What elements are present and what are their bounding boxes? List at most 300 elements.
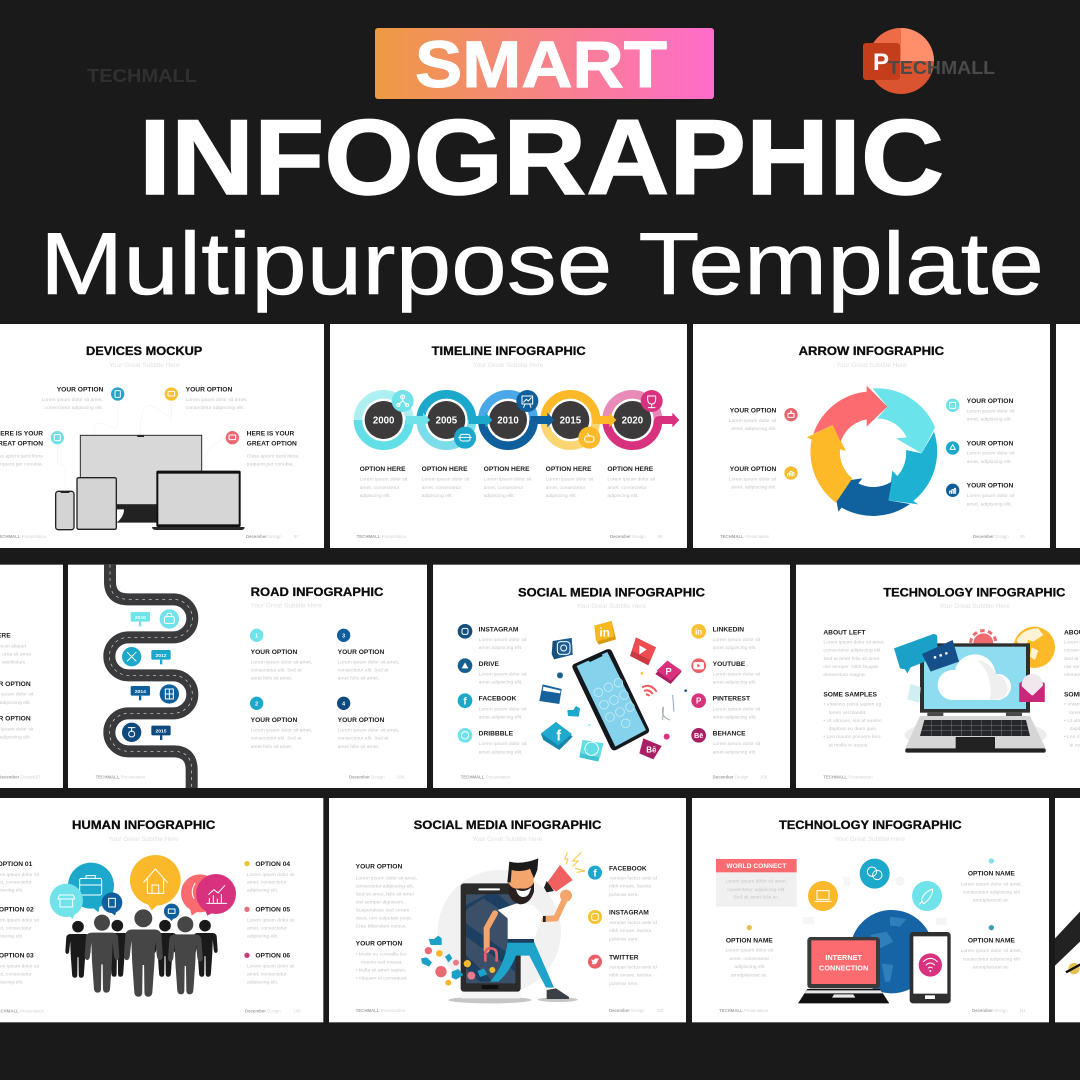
option upper right: consectetur adipiscing elit [963, 890, 1020, 896]
rings [358, 394, 658, 446]
text block two [356, 940, 408, 982]
callout: world connect: WORLD CONNECT [726, 863, 786, 870]
pinterest item: PINTEREST [713, 696, 750, 703]
youtube item: YOUTUBE [713, 661, 746, 668]
footer [357, 534, 663, 539]
about left: nisi semper. Nibh feugiat [823, 664, 879, 670]
magnet [485, 948, 497, 962]
list right [691, 624, 761, 755]
circular arrows [807, 386, 937, 516]
text block one: Cras bibendum cursus. [356, 924, 407, 930]
option columns: adipiscing elit. [360, 493, 391, 499]
option columns [360, 466, 656, 499]
some samples: SOME SAMPLES [823, 691, 878, 698]
option top left: Lorem ipsum dolor sit amet, [41, 397, 103, 403]
heading: SOCIAL MEDIA INFOGRAPHIC [414, 818, 601, 832]
option 06: amet, consectetur [247, 971, 287, 977]
footer: 97 [294, 534, 299, 539]
sign 2010: 2010 [135, 615, 146, 621]
option right: torquent per conubia. [247, 462, 294, 468]
text block one [356, 864, 417, 930]
right option 3 [946, 483, 1015, 507]
option 3: amet felis sit amet. [338, 676, 379, 682]
about left: ABOUT LEFT [823, 629, 865, 636]
subheading: Your Great Subtitle Here [939, 604, 1011, 610]
title: INFOGRAPHIC: INFOGRAPHIC [139, 97, 944, 217]
some samples [823, 691, 882, 748]
back row person 2 [105, 920, 130, 977]
item: facebook: f [593, 868, 597, 879]
option top right: YOUR OPTION [186, 387, 232, 394]
option columns: OPTION HERE [360, 466, 406, 473]
option columns: Lorem ipsum dolor sit [484, 477, 532, 483]
icon: network [392, 390, 414, 412]
item: instagram: pulvinar sem. [609, 936, 639, 942]
drive item: DRIVE [479, 661, 500, 668]
pinterest item [691, 693, 761, 720]
laptop [798, 937, 889, 1003]
panel: social media infographic one [433, 565, 790, 788]
head [507, 858, 538, 904]
some samples: • Ut ultricies, nisi at eusmo [823, 718, 882, 724]
icon: pinterest cube: P [666, 666, 672, 676]
option columns: amet, consectetur [360, 485, 400, 491]
text block two: mauris sed massa. [361, 960, 403, 966]
monitor [80, 435, 202, 523]
about left [823, 629, 885, 678]
option columns: amet, consectetur [607, 485, 647, 491]
option top right [165, 387, 247, 411]
right option 3: Lorem ipsum dolor sit [967, 493, 1015, 499]
footer: 99 [1020, 534, 1025, 539]
facebook item: Lorem ipsum dolor sit [479, 706, 527, 712]
option lower left: ametplacerat ac. [731, 972, 768, 978]
teal bubble: briefcase [68, 863, 114, 912]
option lower left [726, 925, 774, 978]
phone [56, 491, 74, 530]
subheading: Your Great Subtitle Here [577, 604, 647, 610]
option 2: amet felis sit amet. [251, 744, 292, 750]
heading: TECHNOLOGY INFOGRAPHIC [779, 818, 962, 832]
linkedin item [691, 624, 761, 651]
option top right: Lorem ipsum dolor sit amet, [186, 397, 247, 403]
pinterest item: amet adipiscing elit. [713, 714, 756, 720]
some samples: lorem vel blandit. [829, 710, 866, 716]
footer [0, 534, 299, 539]
option lower left: Lorem ipsum dolor sit [726, 948, 774, 954]
option lower right: Lorem ipsum dolor sit amet, [961, 948, 1022, 954]
drive item [458, 658, 527, 686]
option top left [41, 387, 124, 411]
right option 2 [946, 440, 1015, 465]
drive item: Lorem ipsum dolor sit [479, 672, 527, 678]
option 4 [337, 697, 399, 750]
panel: timeline infographic [330, 324, 687, 548]
icon: linkedin cube [594, 621, 616, 645]
pinterest item: Lorem ipsum dolor sit [713, 706, 761, 712]
navy small bubble [102, 892, 122, 916]
item: twitter: pulvinar sem. [609, 981, 639, 987]
right option 1: amet, adipiscing elit. [967, 417, 1012, 423]
icon: piggy [578, 427, 600, 449]
phone illustration [572, 649, 649, 750]
callout: world connect: Lorem ipsum dolor sit amet, [726, 879, 787, 885]
magenta bubble: chart [196, 874, 236, 916]
subtitle: Multipurpose Template: Multipurpose Template [40, 214, 1044, 313]
year 2005 [427, 401, 465, 439]
header [40, 27, 1044, 313]
option 4: Lorem ipsum dolor sit amet, [338, 728, 399, 734]
option 1: YOUR OPTION [251, 649, 297, 656]
footer [96, 775, 404, 780]
connector lines [57, 402, 226, 490]
footer [0, 1008, 301, 1013]
item: facebook: nibh ornare, lacinia [609, 884, 651, 890]
icon: car [454, 427, 476, 449]
icon: folder [539, 684, 562, 704]
callout: world connect [716, 859, 797, 907]
sign 2015: 2015 [155, 729, 167, 735]
option columns: OPTION HERE [484, 466, 530, 473]
subheading: Your Great Subtitle Here [251, 604, 322, 610]
megaphone [544, 865, 573, 902]
calendar [907, 684, 921, 703]
cloud [938, 654, 1011, 700]
right option 2: Lorem ipsum dolor sit [967, 451, 1015, 457]
facebook item: FACEBOOK [479, 696, 517, 703]
footer [720, 534, 1025, 539]
lightning marks [565, 852, 585, 872]
footer: TECHMALL Presentation [461, 774, 511, 779]
option 04: OPTION 04 [255, 861, 290, 868]
option columns: adipiscing elit. [484, 493, 515, 499]
sign 2012 [151, 650, 171, 664]
sign 2014 [131, 686, 150, 700]
year 2020 [613, 401, 651, 439]
icon: PowerPoint logo: P [873, 49, 889, 76]
left option 1 [729, 408, 798, 432]
option lower right: OPTION NAME [968, 937, 1015, 944]
item: facebook: Aenean luctus ante id [609, 876, 657, 882]
option 1 [250, 629, 312, 682]
subheading: Your Great Subtitle Here [473, 363, 544, 369]
icon: rocket circle [912, 881, 942, 911]
option columns: OPTION HERE [422, 466, 468, 473]
icon: stop 1 [160, 609, 179, 629]
icon: instagram cube [552, 638, 573, 659]
option right: Class aptent taciti litora [247, 454, 298, 460]
year 2000: 2000 [373, 416, 394, 427]
option lower right: consectetur adipiscing elit [963, 956, 1020, 962]
option 04: amet, consectetur [247, 880, 287, 886]
right option 1: YOUR OPTION [967, 398, 1013, 405]
dribbble item: DRIBBBLE [479, 731, 514, 738]
option top left: YOUR OPTION [57, 387, 104, 394]
text block one: Sed sit amet, felis sit amet [356, 891, 414, 897]
some samples: dapibus eu diam quis. [829, 726, 877, 732]
text block one: nisl semper dignissim. [356, 899, 405, 905]
sign 2010 [131, 612, 150, 626]
option 2: 2 [255, 701, 258, 707]
callout: world connect: Sed sit amet felis ac. [733, 895, 779, 901]
item: instagram: INSTAGRAM [609, 910, 649, 917]
text block one: consectetur adipiscing elit. [356, 883, 414, 889]
icon: PowerPoint logo [863, 28, 934, 94]
option columns: Lorem ipsum dolor sit [422, 477, 470, 483]
navy bubble: small [164, 904, 179, 921]
year 2000 [365, 401, 403, 439]
icon: facebook cube [541, 722, 573, 750]
arrows [406, 413, 679, 427]
right option 1 [946, 398, 1015, 423]
option 1: 1 [255, 633, 258, 639]
panel: partial slide bottom right [1055, 798, 1080, 1022]
panel: social media infographic two [329, 798, 686, 1022]
text block one: Suspendisse sed ornare [356, 908, 410, 914]
yellow bubble: house [130, 855, 181, 910]
dribbble item: amet adipiscing elit. [479, 749, 522, 755]
icon: chart [516, 390, 538, 412]
footer: December Design [245, 1008, 281, 1013]
footer: 111 [1019, 1008, 1027, 1013]
behance item: BEHANCE [713, 731, 746, 738]
item: twitter: nibh ornare, lacinia [609, 973, 651, 979]
instagram item [458, 624, 527, 651]
watermark right: TECHMALL [888, 58, 995, 78]
option columns: Lorem ipsum dolor sit [607, 477, 656, 483]
icon: pinterest cube [655, 661, 682, 684]
right option 1: Lorem ipsum dolor sit [967, 408, 1015, 414]
year 2020: 2020 [622, 416, 643, 427]
option 4: amet felis sit amet. [338, 744, 379, 750]
jeans and shoe [490, 942, 569, 999]
right option 3: YOUR OPTION [967, 483, 1013, 490]
text fragments [0, 633, 34, 741]
laptop illustration [894, 627, 1055, 753]
option left [0, 430, 64, 468]
left option 2: amet, adipiscing elit. [731, 485, 776, 491]
phone [461, 883, 521, 998]
left option 2: YOUR OPTION [730, 466, 777, 473]
icon: behance cube: Bē [646, 745, 657, 754]
item: instagram [588, 910, 657, 942]
option 05 [244, 907, 295, 939]
footer: 110 [657, 1008, 664, 1013]
text block two: YOUR OPTION [356, 940, 402, 947]
item: twitter [588, 955, 657, 987]
about left: Sed at amet felis sit amet [823, 656, 880, 662]
option 3: consectetur elit. Sed at [338, 668, 389, 674]
footer: December Design [610, 534, 646, 539]
youtube item [691, 658, 761, 686]
laptop: CONNECTION [819, 964, 868, 973]
option 2: Lorem ipsum dolor sit amet, [251, 728, 312, 734]
option columns: OPTION HERE [607, 466, 654, 473]
about left: consectetur adipiscing elit. [823, 648, 882, 654]
linkedin item: amet adipiscing elit. [713, 645, 756, 651]
text block one: Lorem ipsum dolor sit amet, [356, 875, 417, 881]
pinterest item: P [696, 697, 702, 706]
item: twitter: Aenean luctus ante id [609, 965, 657, 971]
faint background icons [803, 876, 947, 925]
option columns: adipiscing elit. [546, 493, 577, 499]
option upper right: Lorem ipsum dolor sit amet, [961, 881, 1022, 887]
option 3: YOUR OPTION [338, 649, 384, 656]
option columns: adipiscing elit. [607, 493, 639, 499]
heading: DEVICES MOCKUP [86, 344, 202, 358]
year 2010 [489, 401, 527, 439]
icon: chat circle [860, 859, 890, 889]
text block two: • Aliquam id consequat. [356, 976, 408, 982]
option columns: amet, consectetur [484, 485, 524, 491]
globe [1014, 627, 1055, 668]
left option 1: YOUR OPTION [730, 408, 777, 415]
footer: December Design [972, 1008, 1008, 1013]
turquoise bubble: shop [50, 884, 83, 919]
option 05: amet, consectetur [247, 925, 287, 931]
youtube item: Lorem ipsum dolor sit [713, 672, 761, 678]
panel: human infographic [0, 798, 323, 1022]
heading: ROAD INFOGRAPHIC [251, 585, 383, 599]
dribbble item [458, 728, 527, 755]
about right [1064, 629, 1080, 748]
icon: play cube [630, 637, 656, 665]
subheading: Your Great Subtitle Here [835, 837, 906, 843]
watermark left: TECHMALL [87, 66, 197, 86]
sign 2014: 2014 [135, 689, 146, 695]
option upper right: ametplacerat ac. [973, 898, 1010, 904]
item: instagram: nibh ornare, lacinia [609, 928, 651, 934]
screen [920, 643, 1030, 713]
option 05: Lorem ipsum dolor sit [247, 917, 295, 923]
item: twitter: TWITTER [609, 955, 639, 962]
linkedin item: in [695, 627, 702, 636]
icon: trophy [641, 390, 663, 412]
option 4: consectetur elit. Sed at [338, 736, 389, 742]
item: facebook: FACEBOOK [609, 865, 647, 872]
icon: behance cube [639, 738, 662, 759]
linkedin item: Lorem ipsum dolor sit [713, 637, 761, 643]
reactions [421, 936, 495, 986]
right option 2: YOUR OPTION [967, 440, 1013, 447]
dribbble item: Lorem ipsum dolor sit [479, 741, 527, 747]
tablet [77, 478, 116, 529]
footer: December Design [349, 775, 385, 780]
right option 3: amet, adipiscing elit. [967, 501, 1012, 507]
subheading: Your Great Subtitle Here [836, 363, 907, 369]
laptop: INTERNET [825, 953, 863, 962]
year 2015 [551, 401, 589, 439]
speech bubbles [894, 634, 959, 673]
panel: partial slide top right [1056, 324, 1080, 548]
callout: world connect: consectetur adipiscing elit. [727, 887, 786, 893]
option 06: Lorem ipsum dolor sit [247, 963, 295, 969]
icon: facebook cube: f [556, 729, 561, 745]
option columns: amet, consectetur [422, 485, 462, 491]
left option 1: Lorem ipsum dolor sit [729, 418, 777, 424]
option lower left: OPTION NAME [726, 937, 773, 944]
item: facebook: pulvinar sem. [609, 892, 639, 898]
envelope [1019, 674, 1045, 702]
footer [356, 1008, 664, 1013]
heading: SOCIAL MEDIA INFOGRAPHIC [518, 585, 705, 599]
option lower right: ametplacerat ac. [973, 964, 1010, 970]
back row person 4 [192, 920, 218, 977]
footer: December Design [609, 1008, 645, 1013]
some samples: at mollis in augue. [829, 742, 869, 748]
icon: linkedin cube: in [599, 626, 610, 640]
front person right [168, 916, 203, 994]
subheading: Your Great Subtitle Here [109, 363, 180, 369]
option right: GREAT OPTION [247, 441, 297, 448]
icon: thumb [567, 706, 580, 717]
option right [226, 430, 298, 468]
footer: TECHMALL Presentation [720, 534, 770, 539]
timeline chart [358, 390, 679, 449]
globe [850, 910, 933, 993]
footer: TECHMALL Presentation [823, 774, 873, 779]
option lower right [961, 925, 1022, 970]
left option 1: amet, adipiscing elit. [731, 426, 776, 432]
option 06: OPTION 06 [255, 953, 290, 960]
text block two: • Morbi eu convallis leo [356, 952, 407, 958]
option 04: Lorem ipsum dolor sit [247, 872, 295, 878]
icon: wifi [642, 686, 657, 696]
option 1: amet felis sit amet. [251, 676, 292, 682]
text block one: YOUR OPTION [356, 864, 402, 871]
option columns: Lorem ipsum dolor sit [360, 477, 408, 483]
left option 2 [729, 466, 798, 491]
facebook item: f [463, 697, 467, 708]
option upper right [961, 858, 1022, 904]
text block two: • Nulla sit amet sapien. [356, 968, 406, 974]
list left [458, 624, 527, 755]
yellow pen mark [1066, 963, 1080, 974]
option 06: adipiscing elit. [247, 979, 278, 985]
option lower left: adipiscing elit [734, 964, 765, 970]
decorative dots [557, 672, 687, 740]
heading: TIMELINE INFOGRAPHIC [432, 344, 586, 358]
behance item [691, 728, 761, 755]
instagram item: Lorem ipsum dolor sit [479, 637, 527, 643]
footer [719, 1008, 1027, 1013]
badge: SMART: SMART [415, 27, 667, 101]
behance item: Lorem ipsum dolor sit [713, 741, 761, 747]
instagram item: INSTAGRAM [479, 627, 519, 634]
option 3: Lorem ipsum dolor sit amet, [338, 659, 399, 665]
back row person 3 [152, 920, 178, 977]
phone [910, 932, 951, 1003]
option upper right: OPTION NAME [968, 871, 1015, 878]
option columns: amet, consectetur [546, 485, 586, 491]
option 1: consectetur elit. Sed at [251, 668, 302, 674]
footer: 107 [33, 775, 41, 780]
sign 2012: 2012 [155, 653, 167, 659]
panel: technology infographic two [692, 798, 1049, 1022]
panel: partial slide left [0, 565, 63, 788]
panel: technology infographic one [796, 565, 1080, 788]
year 2005: 2005 [436, 416, 458, 427]
option 2: YOUR OPTION [251, 717, 297, 724]
option 04 [244, 861, 295, 894]
footer: December Design [713, 774, 749, 779]
right option 2: amet, adipiscing elit. [967, 459, 1012, 465]
text block one: risus, non vulputate justo. [356, 916, 412, 922]
black diagonal band [1055, 912, 1080, 966]
panel: devices mockup [0, 324, 324, 548]
icon: stop 2 [122, 647, 141, 666]
year 2010: 2010 [497, 416, 519, 427]
